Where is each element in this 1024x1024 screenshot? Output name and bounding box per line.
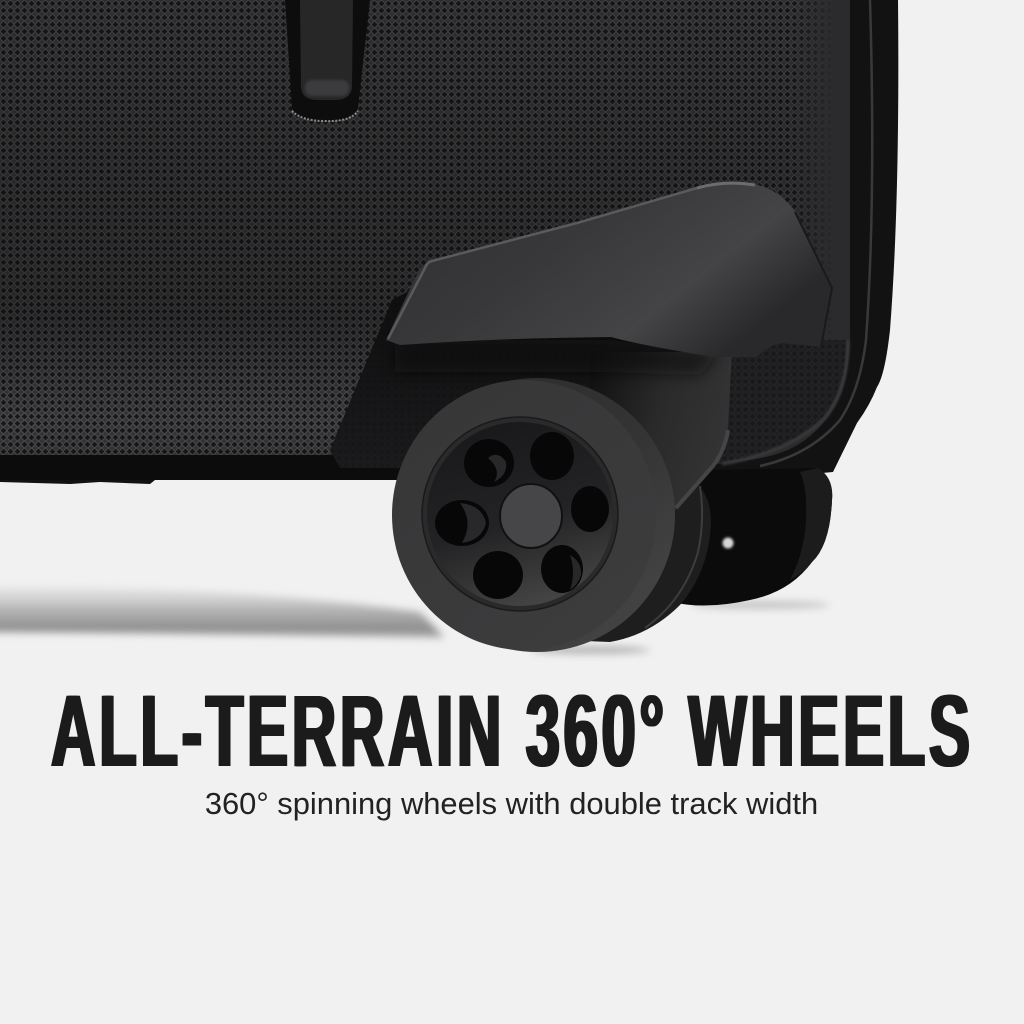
title: ALL-TERRAIN 360° WHEELS bbox=[51, 674, 974, 788]
subtitle: 360° spinning wheels with double track width bbox=[205, 786, 818, 821]
second front wheel bbox=[560, 480, 711, 642]
suitcase shell bbox=[0, 0, 898, 484]
rear wheel bbox=[660, 468, 832, 606]
wheel guard bbox=[386, 182, 832, 357]
front wheel bbox=[392, 378, 675, 652]
handle recess bbox=[285, 0, 370, 121]
dark panel under wheel guard bbox=[330, 280, 848, 468]
hole interior highlights bbox=[460, 455, 581, 590]
shadow below guard bbox=[395, 340, 720, 375]
wheel hub bbox=[500, 484, 562, 548]
wheel holes bbox=[435, 432, 609, 599]
ground shadow bbox=[0, 587, 830, 654]
caster fork bbox=[590, 352, 732, 510]
